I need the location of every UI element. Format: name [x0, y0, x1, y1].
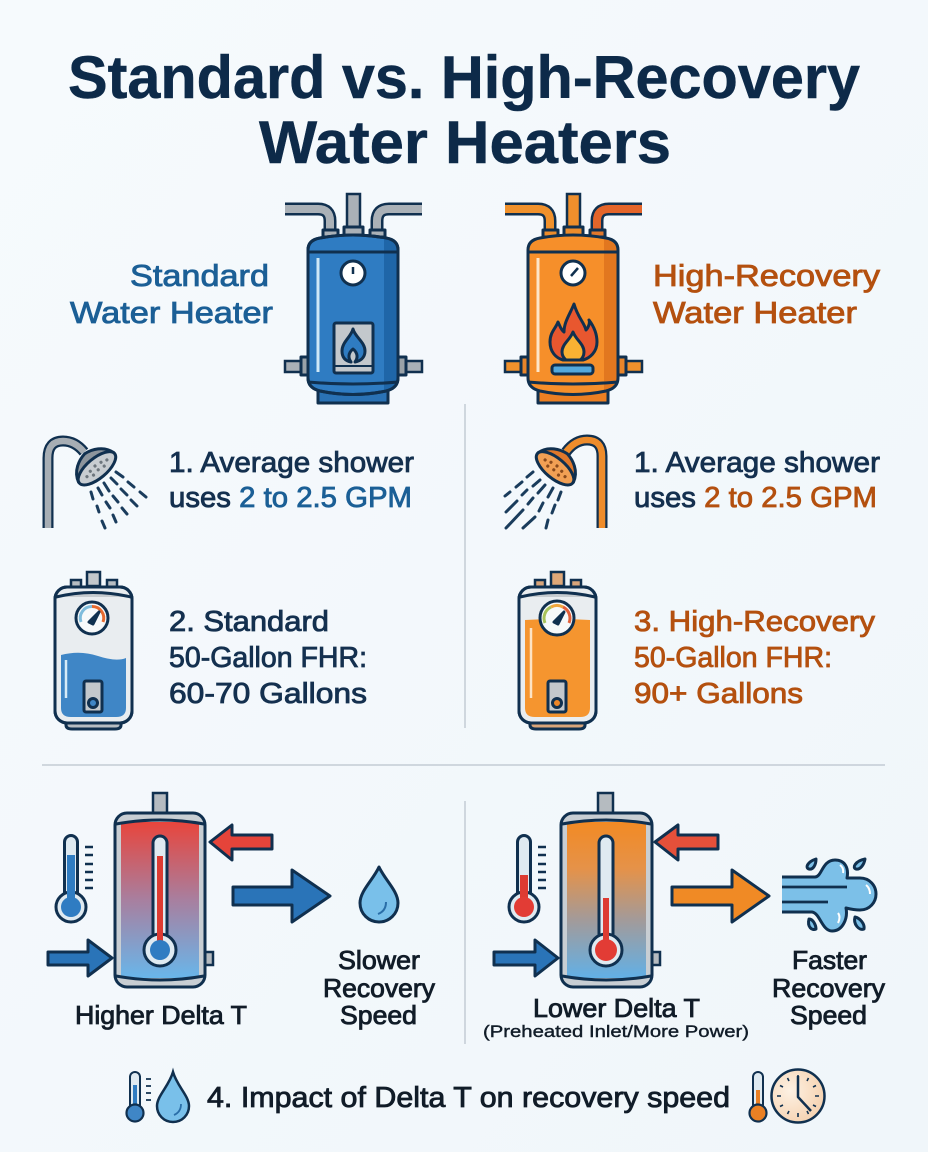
icon: footer thermometer and clock [750, 1070, 824, 1122]
label: faster recovery speed: Faster [792, 945, 867, 975]
label: standard water heater [70, 258, 273, 330]
diagram: lower delta T tank [561, 793, 660, 987]
text: standard FHR: 2. Standard [169, 606, 329, 638]
diagram: higher delta T tank [115, 793, 213, 987]
label: faster recovery speed: Speed [790, 1000, 867, 1030]
arrow: blue cold inlet, standard [48, 940, 112, 976]
arrow: blue output, standard [233, 870, 330, 922]
icon: high-recovery tank full [519, 572, 596, 729]
label: slower recovery speed: Slower [338, 945, 420, 975]
label: lower delta T: (Preheated Inlet/More Power) [483, 1022, 749, 1041]
arrow: orange output, high-recovery [672, 870, 769, 922]
icon: standard blue water heater [285, 194, 422, 403]
icon: standard shower head [48, 439, 146, 528]
icon: warm thermometer [509, 842, 546, 922]
icon: footer thermometer and drop [126, 1072, 189, 1122]
text: average shower, high-recovery: uses 2 to 2.5 GPM [634, 482, 877, 514]
text: average shower, high-recovery [634, 447, 880, 514]
label: faster recovery speed [772, 945, 885, 1030]
icon: standard tank partially full [55, 572, 132, 729]
internal thermometer [590, 843, 622, 966]
title: Water Heaters [259, 109, 671, 176]
icon: cold thermometer [56, 842, 93, 922]
text: high-recovery FHR: 50-Gallon FHR: [634, 642, 832, 674]
icon: fast water stream [782, 859, 876, 931]
text: standard FHR: 60-70 Gallons [169, 678, 367, 710]
label: slower recovery speed: Recovery [323, 973, 435, 1003]
text: high-recovery FHR [634, 606, 876, 710]
text: average shower, standard: uses 2 to 2.5 GPM [169, 482, 412, 514]
title [68, 44, 861, 176]
internal thermometer [144, 843, 176, 966]
label: faster recovery speed: Recovery [772, 973, 885, 1003]
icon: high-recovery orange water heater [505, 194, 642, 403]
label: lower delta T: Lower Delta T [533, 993, 700, 1023]
title: Standard vs. High-Recovery [68, 44, 861, 111]
text: high-recovery FHR: 90+ Gallons [634, 678, 803, 710]
text: standard FHR: 50-Gallon FHR: [169, 642, 367, 674]
icon: high-recovery shower head [505, 439, 602, 528]
text: average shower, standard [169, 447, 414, 514]
label: standard water heater: Standard [130, 258, 269, 293]
label: slower recovery speed [323, 945, 435, 1030]
label: high-recovery water heater [653, 258, 881, 330]
label: slower recovery speed: Speed [340, 1000, 417, 1030]
icon: water drop [360, 867, 398, 922]
label: high-recovery water heater: Water Heater [653, 295, 857, 330]
text: standard FHR [169, 606, 367, 710]
label: high-recovery water heater: High-Recovery [653, 258, 881, 293]
arrow: red inlet, standard [210, 825, 272, 860]
text: average shower, high-recovery: 1. Average shower [634, 447, 880, 479]
label: higher delta T: Higher Delta T [75, 1000, 247, 1030]
text: high-recovery FHR: 3. High-Recovery [634, 606, 876, 638]
arrow: red inlet, high-recovery [655, 825, 718, 860]
caption: impact of delta T: 4. Impact of Delta T on recovery speed [207, 1082, 730, 1114]
text: average shower, standard: 1. Average shower [169, 447, 414, 479]
label: lower delta T [483, 993, 749, 1041]
arrow: blue inlet, high-recovery [494, 940, 558, 976]
label: standard water heater: Water Heater [70, 295, 273, 330]
